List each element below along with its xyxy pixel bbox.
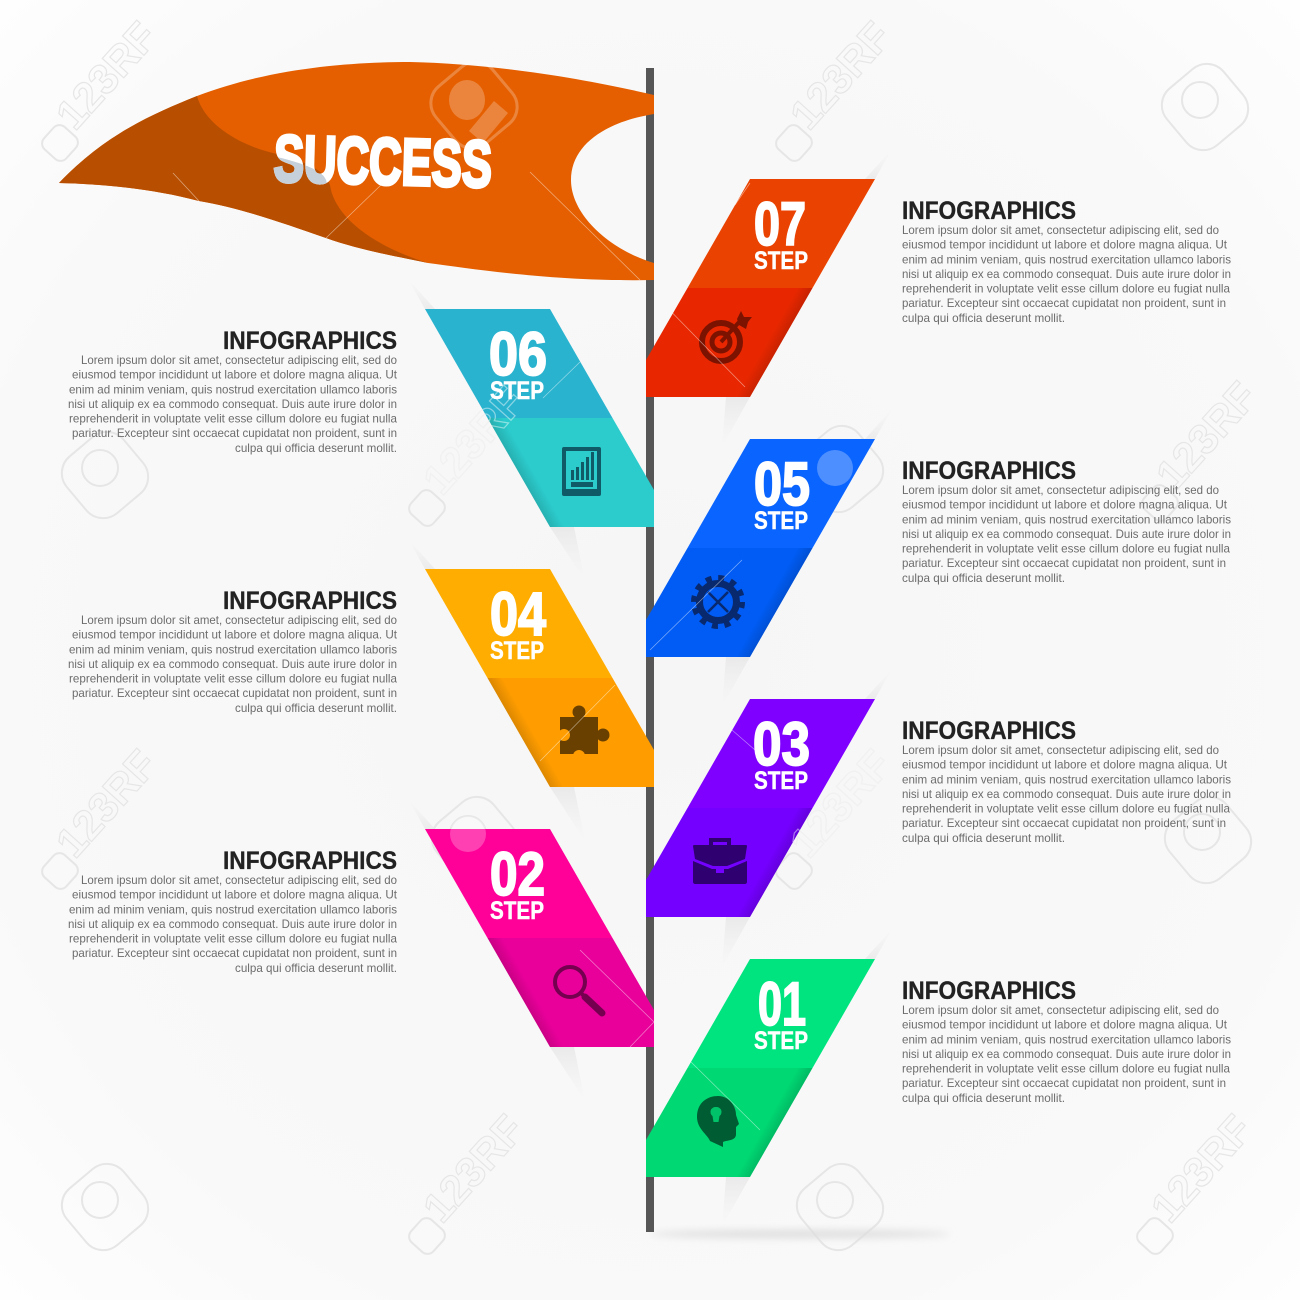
heading: INFOGRAPHICS [902,457,1076,485]
text block: pariatur. Excepteur sint occaecat cupidatat non proident, sunt in [72,946,397,960]
text block: culpa qui officia deserunt mollit. [902,571,1065,585]
heading: INFOGRAPHICS [902,717,1076,745]
ground shadow [650,1230,950,1238]
text block: pariatur. Excepteur sint occaecat cupidatat non proident, sunt in [72,426,397,440]
band top [425,829,612,938]
watermarks over bands [414,378,900,866]
text block [902,483,1231,585]
text block [902,1003,1231,1105]
band bottom [488,938,654,1047]
heading: INFOGRAPHICS [223,847,397,875]
band top [688,179,875,288]
watermarks: 123RF [414,378,533,503]
text block: nisi ut aliquip ex ea commodo consequat. Duis aute irure dolor in [902,527,1231,541]
band bottom [488,678,654,787]
flag shaded fold [59,96,428,263]
band top [688,439,875,548]
text block: Lorem ipsum dolor sit amet, consectetur adipiscing elit, sed do [902,1003,1219,1017]
watermark dot [817,450,853,486]
flag watermark egg [422,53,526,157]
shadows [722,149,892,447]
text block: culpa qui officia deserunt mollit. [235,441,397,455]
band bottom [646,288,812,397]
panel: step 02 [68,799,654,1101]
number: 07 [754,190,806,258]
watermarks over bands: 123RF [781,741,900,866]
text block: reprehenderit in voluptate velit esse cillum dolore eu fugiat nulla [902,802,1230,816]
text block: culpa qui officia deserunt mollit. [902,831,1065,845]
text block: eiusmod tempor incididunt ut labore et dolore magna aliqua. Ut [72,888,398,902]
icon: tablet chart [562,447,601,496]
text block: pariatur. Excepteur sint occaecat cupidatat non proident, sunt in [72,686,397,700]
text block: reprehenderit in voluptate velit esse cillum dolore eu fugiat nulla [69,932,397,946]
panel: step 07 [646,149,1231,447]
text block: eiusmod tempor incididunt ut labore et dolore magna aliqua. Ut [72,368,398,382]
text block: nisi ut aliquip ex ea commodo consequat. Duis aute irure dolor in [902,1047,1231,1061]
band shade [735,548,812,657]
text block: nisi ut aliquip ex ea commodo consequat. Duis aute irure dolor in [68,657,397,671]
icon: gear [694,578,742,626]
number: 01 [758,970,806,1038]
band bottom [646,808,812,917]
band shade [735,1068,812,1177]
text block [902,223,1231,325]
text block: nisi ut aliquip ex ea commodo consequat. Duis aute irure dolor in [902,267,1231,281]
text block: Lorem ipsum dolor sit amet, consectetur adipiscing elit, sed do [81,613,397,627]
icon: head with bulb [697,1096,739,1147]
watermarks: 123RF [47,741,166,866]
watermarks over bands: 123RF [414,378,533,503]
text block: enim ad minim veniam, quis nostrud exercitation ullamco laboris [902,252,1231,266]
watermarks: 123RF [1142,1106,1261,1231]
number: 06 [489,320,547,388]
heading: INFOGRAPHICS [223,587,397,615]
text block [68,873,398,975]
shadows [408,279,585,581]
text block: enim ad minim veniam, quis nostrud exercitation ullamco laboris [902,512,1231,526]
panel: step 01 [646,929,1231,1227]
text block: Lorem ipsum dolor sit amet, consectetur adipiscing elit, sed do [902,483,1219,497]
text block: Lorem ipsum dolor sit amet, consectetur adipiscing elit, sed do [81,353,397,367]
band bottom [646,1068,812,1177]
band top [425,569,612,678]
text block: enim ad minim veniam, quis nostrud exercitation ullamco laboris [69,642,397,656]
text block: enim ad minim veniam, quis nostrud exercitation ullamco laboris [69,902,397,916]
panel: step 03 [646,669,1231,967]
band bottom [488,418,654,527]
text block: culpa qui officia deserunt mollit. [235,701,397,715]
shadows [722,409,892,707]
watermarks: 123RF [781,741,900,866]
text block: eiusmod tempor incididunt ut labore et dolore magna aliqua. Ut [902,1018,1228,1032]
shadows [722,669,892,967]
text block: eiusmod tempor incididunt ut labore et dolore magna aliqua. Ut [72,628,398,642]
icon: target [702,311,752,361]
band top [688,959,875,1068]
text block: enim ad minim veniam, quis nostrud exercitation ullamco laboris [902,1032,1231,1046]
step label: STEP [754,1027,808,1055]
text block: culpa qui officia deserunt mollit. [902,1091,1065,1105]
text block: reprehenderit in voluptate velit esse cillum dolore eu fugiat nulla [902,1062,1230,1076]
flag body [59,62,654,280]
text block: nisi ut aliquip ex ea commodo consequat. Duis aute irure dolor in [68,397,397,411]
text block: enim ad minim veniam, quis nostrud exercitation ullamco laboris [69,382,397,396]
watermarks: 123RF [1147,373,1266,498]
shadows [408,539,585,841]
band shade [735,808,812,917]
text block: Lorem ipsum dolor sit amet, consectetur adipiscing elit, sed do [902,223,1219,237]
text block: culpa qui officia deserunt mollit. [902,311,1065,325]
text block: culpa qui officia deserunt mollit. [235,961,397,975]
number: 03 [753,710,810,778]
text block: nisi ut aliquip ex ea commodo consequat. Duis aute irure dolor in [902,787,1231,801]
band shade [488,938,565,1047]
step label: STEP [490,637,544,665]
heading: INFOGRAPHICS [902,977,1076,1005]
watermarks: 123RF [47,13,166,138]
text block: reprehenderit in voluptate velit esse cillum dolore eu fugiat nulla [902,282,1230,296]
number: 04 [490,580,546,648]
text block: enim ad minim veniam, quis nostrud exercitation ullamco laboris [902,772,1231,786]
text block: eiusmod tempor incididunt ut labore et dolore magna aliqua. Ut [902,238,1228,252]
band shade [488,418,565,527]
step label: STEP [754,247,808,275]
icon: puzzle piece [558,706,610,762]
band bottom [646,548,812,657]
shadows [408,799,585,1101]
heading: INFOGRAPHICS [902,197,1076,225]
text block [902,743,1231,845]
step label: STEP [490,897,544,925]
band shade [735,288,812,397]
flag pole [646,68,654,1232]
heading: INFOGRAPHICS [223,327,397,355]
text block: pariatur. Excepteur sint occaecat cupidatat non proident, sunt in [902,816,1226,830]
title shaded letter part: SUCCESS [273,121,493,201]
step label: STEP [490,377,544,405]
panel: step 05 [646,409,1231,707]
watermark dot [450,816,486,852]
band shade [488,678,565,787]
shadows [722,929,892,1227]
panel: step 04 [68,539,654,841]
watermarks: 123RF [414,1106,533,1231]
flag title: SUCCESS [273,121,493,201]
panel: step 06 [68,279,654,581]
step label: STEP [754,767,808,795]
text block: eiusmod tempor incididunt ut labore et dolore magna aliqua. Ut [902,498,1228,512]
number: 05 [754,450,810,518]
watermarks: 123RF [781,13,900,138]
icon: briefcase [693,838,747,884]
text block: nisi ut aliquip ex ea commodo consequat. Duis aute irure dolor in [68,917,397,931]
text block: eiusmod tempor incididunt ut labore et dolore magna aliqua. Ut [902,758,1228,772]
text block: pariatur. Excepteur sint occaecat cupidatat non proident, sunt in [902,1076,1226,1090]
text block: Lorem ipsum dolor sit amet, consectetur adipiscing elit, sed do [81,873,397,887]
text block: pariatur. Excepteur sint occaecat cupidatat non proident, sunt in [902,296,1226,310]
text block [68,613,398,715]
text block: reprehenderit in voluptate velit esse cillum dolore eu fugiat nulla [69,672,397,686]
text block: reprehenderit in voluptate velit esse cillum dolore eu fugiat nulla [69,412,397,426]
text block [68,353,398,455]
number: 02 [490,840,545,908]
text block: Lorem ipsum dolor sit amet, consectetur adipiscing elit, sed do [902,743,1219,757]
flag [59,53,654,280]
text block: pariatur. Excepteur sint occaecat cupidatat non proident, sunt in [902,556,1226,570]
text block: reprehenderit in voluptate velit esse cillum dolore eu fugiat nulla [902,542,1230,556]
step label: STEP [754,507,808,535]
band top [688,699,875,808]
band top [425,309,612,418]
icon: magnifier [555,967,602,1013]
